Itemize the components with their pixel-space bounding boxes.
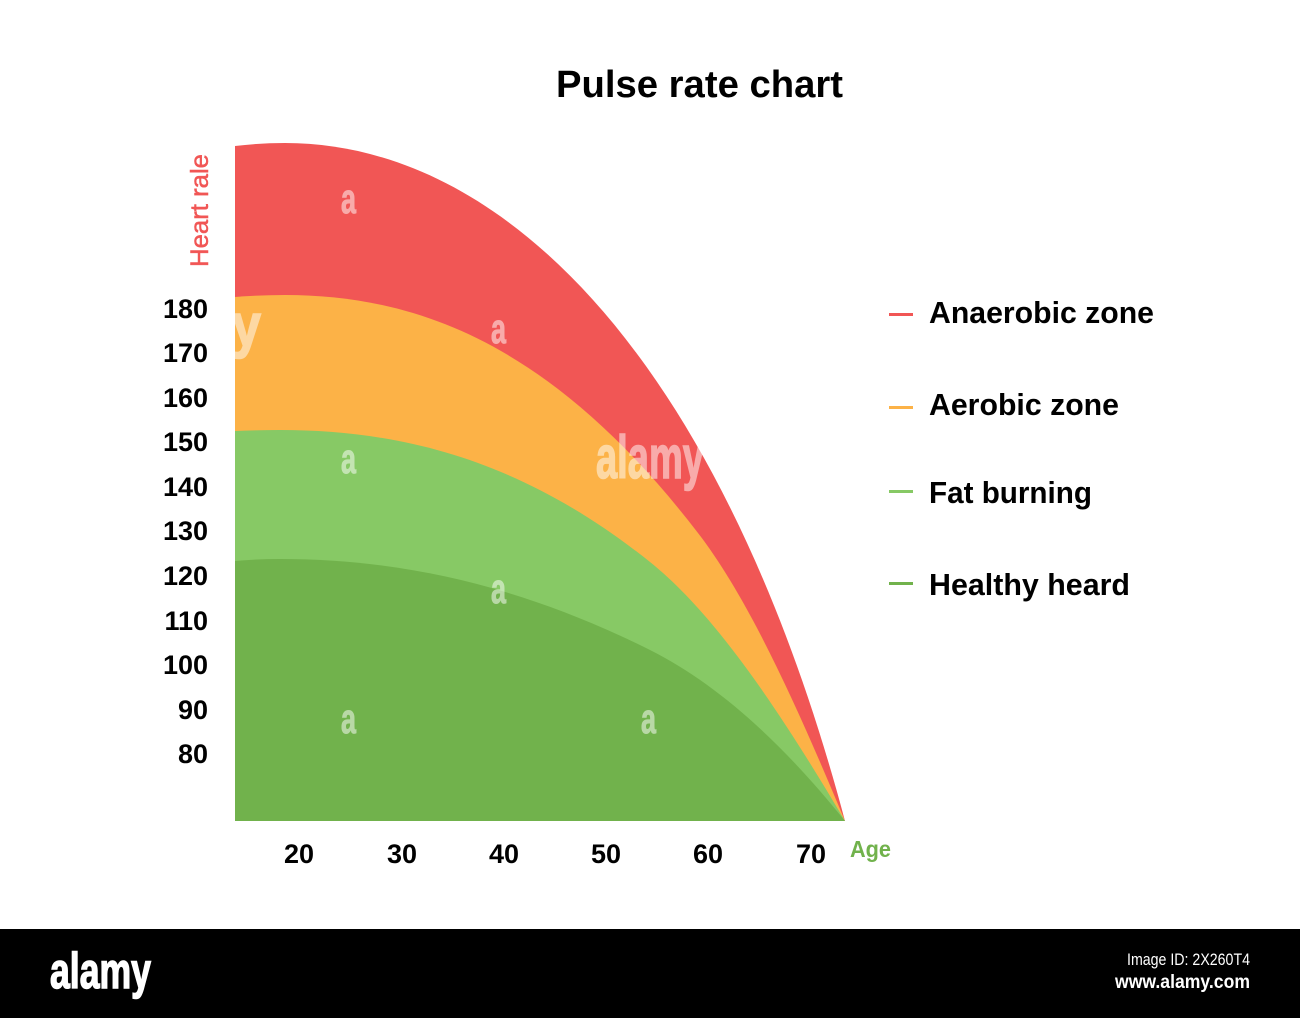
- watermarks: a: [341, 175, 356, 222]
- legend item: healthy heard: Healthy heard: [929, 567, 1130, 602]
- y axis labels: 130: [163, 516, 208, 546]
- y axis labels: 120: [163, 561, 208, 591]
- x axis labels: 60: [693, 839, 723, 869]
- zone: healthy heart: [235, 559, 845, 821]
- image id: Image ID: 2X260T4: [1127, 950, 1250, 969]
- y axis labels: 80: [178, 739, 208, 769]
- y axis labels: 90: [178, 695, 208, 725]
- footer band: [0, 929, 1300, 1018]
- x axis labels: 20: [284, 839, 314, 869]
- watermarks: a: [491, 305, 506, 352]
- y axis labels: 150: [163, 427, 208, 457]
- y axis labels: 100: [163, 650, 208, 680]
- x axis labels: 40: [489, 839, 519, 869]
- y axis labels: 180: [163, 294, 208, 324]
- legend: [889, 295, 1154, 602]
- zone: anaerobic: [235, 143, 845, 821]
- watermarks: a: [341, 695, 356, 742]
- watermarks: a: [491, 565, 506, 612]
- watermarks: a: [341, 435, 356, 482]
- watermarks: alamy: [596, 424, 704, 491]
- y axis labels: 160: [163, 383, 208, 413]
- watermarks: a: [641, 695, 656, 742]
- y axis title: Heart rale: [186, 154, 214, 267]
- x axis title: Age: [850, 836, 891, 862]
- watermarks: [232, 175, 704, 742]
- x axis labels: 70: [796, 839, 826, 869]
- website: www.alamy.com: [1114, 972, 1250, 993]
- y axis labels: [163, 294, 208, 769]
- y axis labels: 170: [163, 338, 208, 368]
- y axis labels: 110: [164, 606, 208, 636]
- title: Pulse rate chart: [556, 64, 843, 106]
- x axis labels: 30: [387, 839, 417, 869]
- watermarks: y: [232, 292, 262, 359]
- legend item: anaerobic zone: Anaerobic zone: [929, 295, 1154, 330]
- legend item: fat burning: Fat burning: [929, 475, 1092, 510]
- x axis labels: [284, 839, 826, 869]
- footer logo: alamy: [50, 943, 151, 999]
- area chart: pulse zones: [235, 143, 845, 821]
- x axis labels: 50: [591, 839, 621, 869]
- legend item: aerobic zone: Aerobic zone: [929, 387, 1119, 422]
- y axis labels: 140: [163, 472, 208, 502]
- zone: aerobic: [235, 295, 845, 821]
- zone: fat burning: [235, 430, 845, 821]
